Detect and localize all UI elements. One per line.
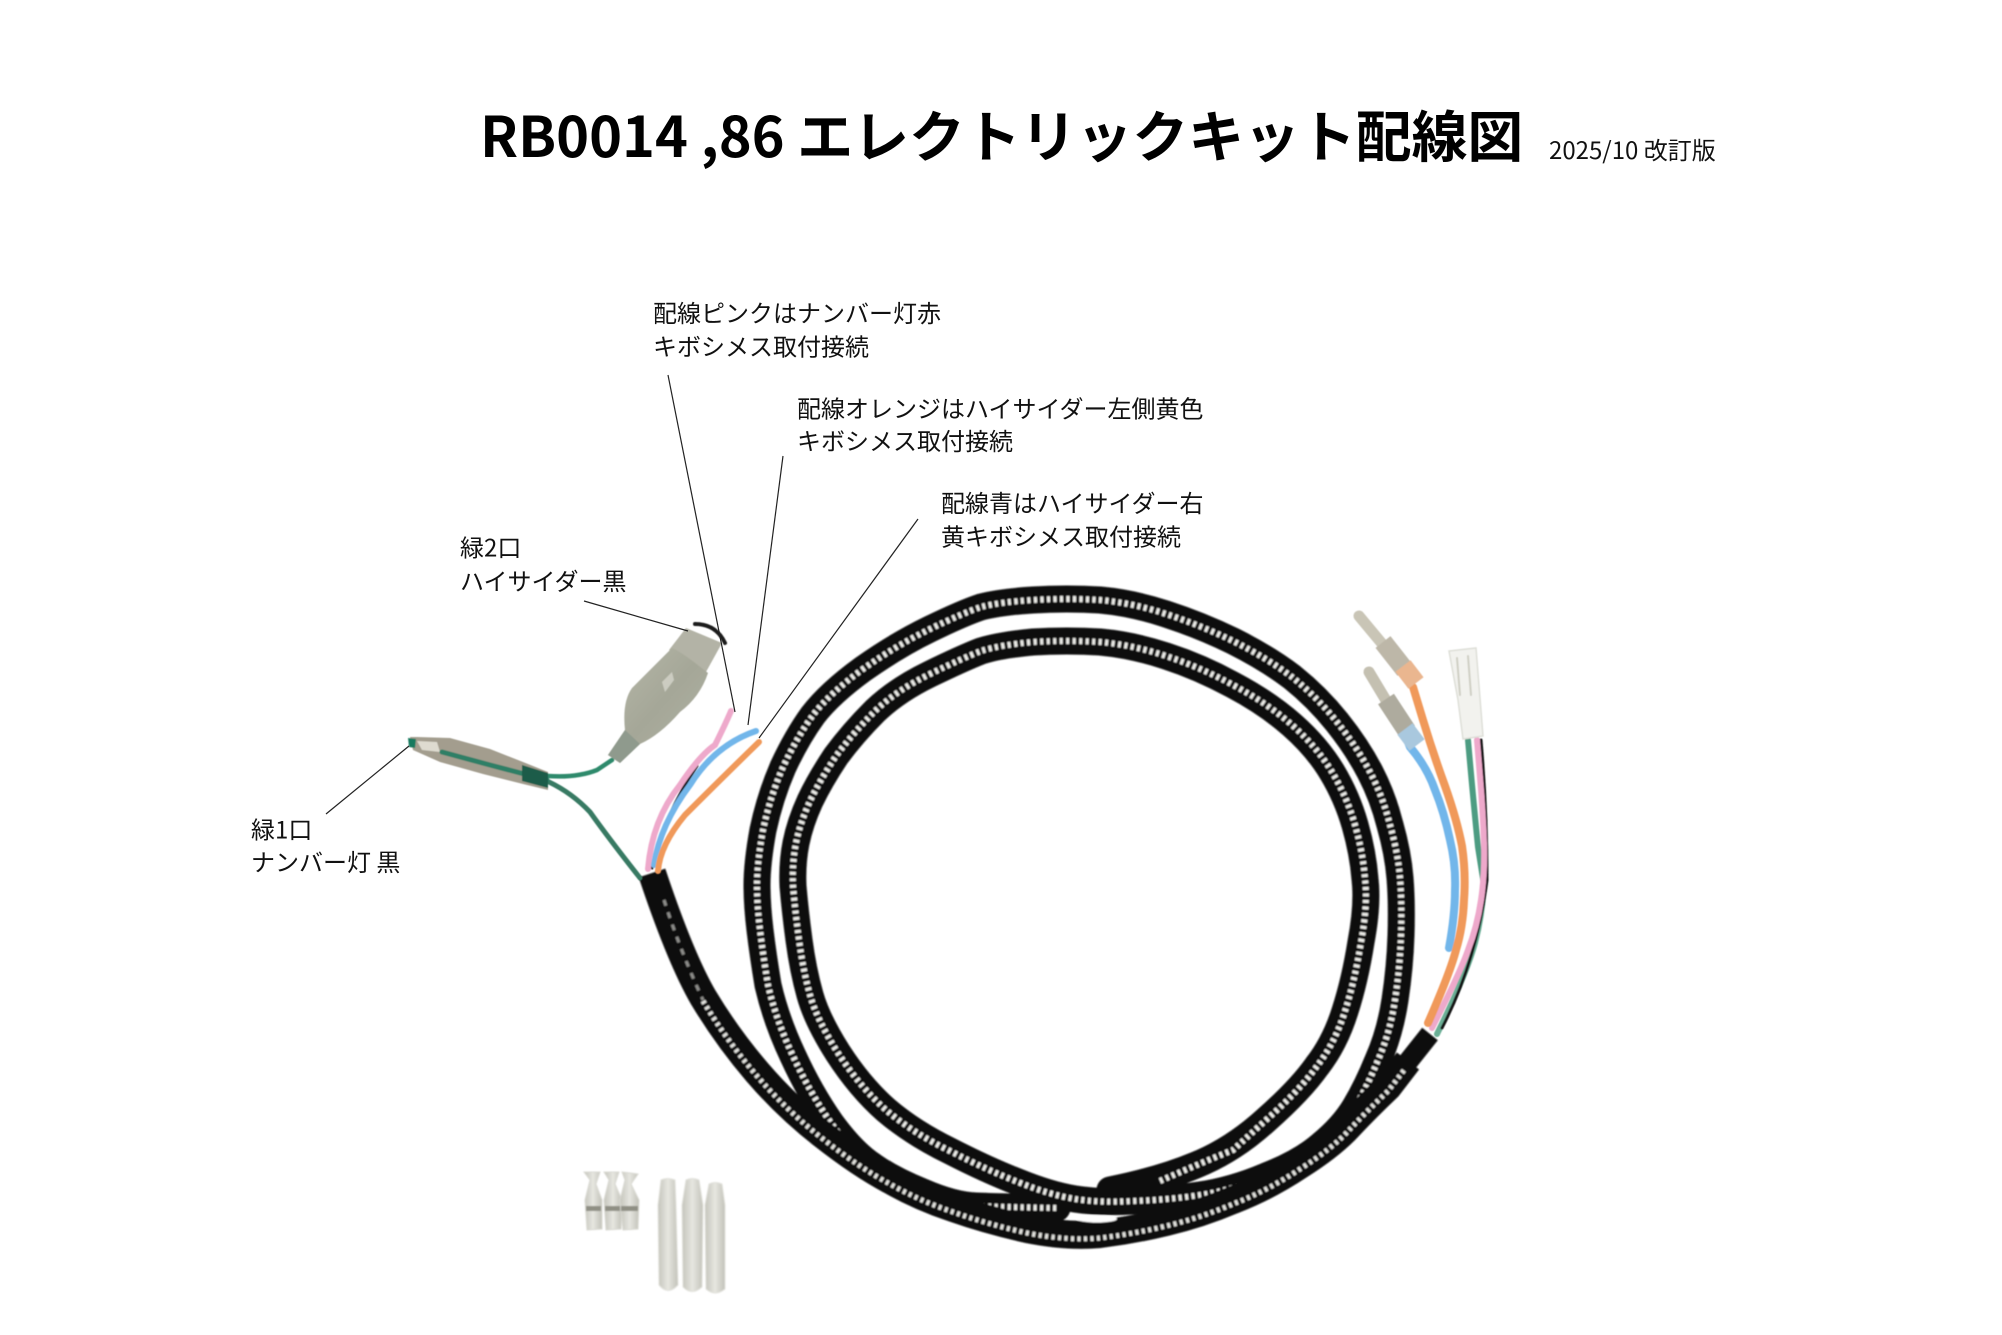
label: orange wire: 配線オレンジはハイサイダー左側黄色 — [797, 390, 1204, 424]
male bullet terminal: blue — [1369, 672, 1417, 745]
cable jacket end — [1403, 1034, 1430, 1068]
green wire right lower — [1437, 880, 1484, 1034]
cable ring black sheath — [757, 599, 1401, 1208]
title: RB0014 ,86 エレクトリックキット配線図 — [480, 93, 1523, 174]
green wire to jacket — [549, 782, 640, 878]
label: pink wire — [653, 294, 941, 362]
leader lines — [326, 375, 918, 814]
cable ring spring pattern — [757, 599, 1401, 1208]
leader: green 1 — [326, 746, 409, 814]
loose spare terminals — [584, 1172, 725, 1293]
white two-pin coupler — [1449, 648, 1483, 739]
blue wire left — [654, 731, 756, 865]
insulating sleeve 1 — [658, 1178, 678, 1290]
green wire right upper — [1468, 740, 1484, 885]
label: blue wire — [941, 484, 1204, 552]
label: blue wire: 配線青はハイサイダー右 — [941, 484, 1204, 519]
gap between strands — [1077, 1216, 1117, 1222]
coiled black harness cable — [652, 599, 1430, 1239]
main jacketed cable sheath — [652, 873, 1408, 1235]
orange wire right — [1413, 687, 1465, 1023]
black thin wire left — [652, 766, 697, 868]
insulating sleeve 3 — [705, 1182, 725, 1293]
left stripped wires and connectors — [408, 624, 759, 878]
female terminal 1 — [584, 1172, 602, 1230]
leader: pink — [668, 375, 735, 712]
green wire to boot — [548, 760, 612, 776]
main cable gloss — [664, 900, 703, 1000]
blue wire right — [1403, 730, 1455, 948]
label: blue wire: 黄キボシメス取付接続 — [941, 518, 1181, 552]
leader: green 2 — [584, 601, 688, 631]
female terminal 2 — [604, 1172, 622, 1230]
label: green port 1: ナンバー灯 黒 — [251, 843, 400, 878]
leader: orange — [748, 456, 783, 725]
label: orange wire: キボシメス取付接続 — [797, 422, 1013, 457]
label: green port 2 — [460, 528, 627, 597]
label: pink wire: キボシメス取付接続 — [653, 328, 869, 362]
insulating sleeve 2 — [682, 1178, 703, 1292]
pink wire right — [1432, 740, 1484, 1028]
black wire right — [1442, 740, 1487, 1028]
number-light connector — [408, 737, 548, 790]
main cable spring pattern — [703, 1001, 1408, 1239]
label: green port 1: 緑1口 — [251, 810, 312, 846]
label: orange wire — [797, 390, 1204, 457]
high-sider connector — [608, 624, 725, 763]
label: green port 1 — [251, 810, 400, 878]
revision date: 2025/10 改訂版 — [1549, 131, 1716, 166]
label: green port 2: 緑2口 — [460, 528, 521, 564]
label: pink wire: 配線ピンクはナンバー灯赤 — [653, 294, 941, 329]
label: green port 2: ハイサイダー黒 — [460, 562, 627, 597]
orange wire left — [658, 742, 759, 871]
male bullet terminal: orange — [1359, 616, 1416, 683]
pink wire left — [648, 711, 731, 869]
female terminal 3 — [620, 1172, 639, 1230]
leader: blue — [759, 519, 918, 738]
right wire bundle and connectors — [1359, 616, 1487, 1034]
